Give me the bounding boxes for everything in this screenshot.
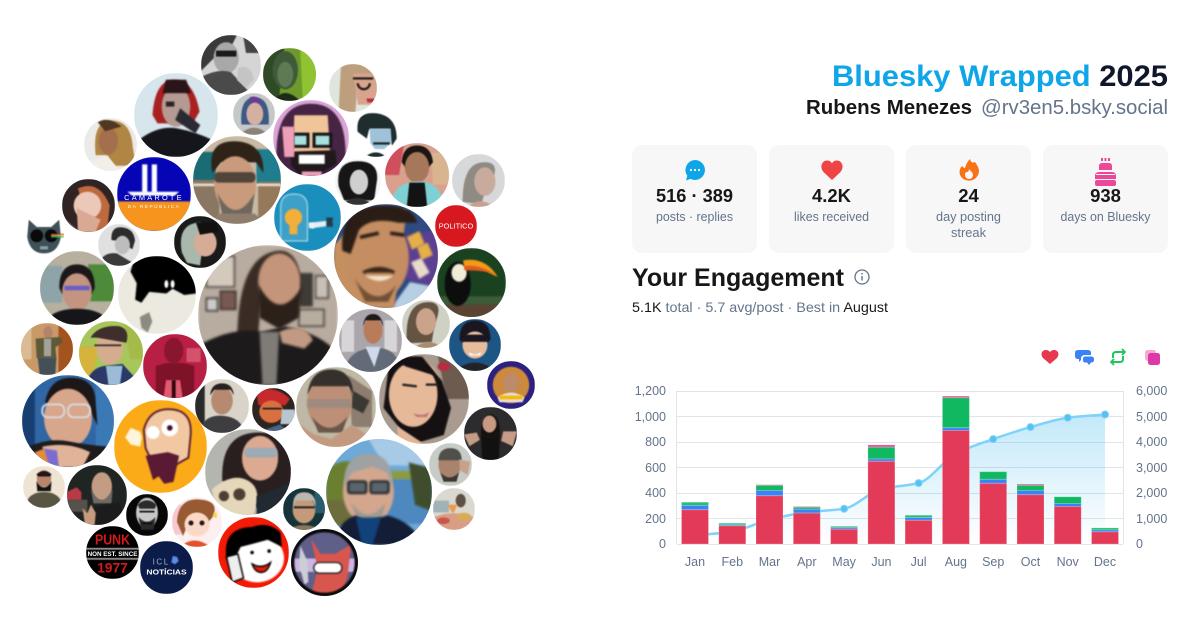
avatar: red duotone comic (143, 334, 207, 398)
icon: birthday cake (1095, 158, 1116, 186)
stat card: posts and replies (632, 145, 757, 253)
avatar: PUNK non est since 1977: 1977 (97, 561, 128, 576)
avatar: black blob illustration (118, 256, 196, 334)
avatar: badge with man, purple ring (487, 361, 535, 409)
engagement chart (635, 384, 1167, 569)
bar: Feb (719, 523, 746, 544)
left axis: 800 (645, 435, 666, 449)
legend icon: reposts (1111, 349, 1125, 365)
avatar: smiling man with tarot cards (334, 204, 438, 308)
avatar: woman with purple glasses (40, 251, 114, 325)
right axis: 5,000 (1136, 410, 1167, 424)
avatar: Camarote da Republica logo (117, 157, 191, 231)
avatar: smiling woman with dark curly hair (379, 354, 469, 444)
right axis: 3,000 (1136, 461, 1167, 475)
left axis: 0 (659, 537, 666, 551)
left axis (635, 384, 666, 551)
avatar: orange haired woman (62, 179, 115, 232)
avatar: bald cartoon on yellow (114, 400, 207, 493)
bar: Oct (1017, 484, 1044, 544)
month labels: Oct (1021, 555, 1041, 569)
avatar: PUNK non est since 1977: PUNK (95, 533, 131, 549)
avatar: long-haired woman (402, 300, 450, 348)
avatar: man with glasses, shirtless (296, 367, 376, 447)
month labels: Sep (982, 555, 1004, 569)
avatar: cartoon man with glasses (273, 100, 349, 176)
avatar: main profile, man with long hair and beard (198, 245, 338, 385)
avatar: ICL Noticias: NOTÍCIAS (146, 567, 187, 576)
bar: Mar (756, 485, 783, 544)
right axis: 6,000 (1136, 384, 1167, 398)
avatar: ICL Noticias (140, 541, 193, 594)
stat card: days on Bluesky (1043, 145, 1168, 253)
left axis: 200 (645, 512, 666, 526)
avatar: woman with skull (205, 429, 291, 515)
avatar: woman with blue glasses, rainbow shirt (22, 375, 114, 467)
subtitle: name and handle: @rv3en5.bsky.social (981, 97, 1168, 119)
stat card: day posting streak: streak (951, 225, 986, 240)
month labels: Dec (1094, 555, 1116, 569)
stat card: day posting streak: day posting (936, 209, 1001, 224)
legend icon: likes (1042, 350, 1058, 364)
avatar: Camarote da Republica logo: CAMAROTE (124, 193, 184, 202)
bar: Jul (905, 515, 932, 544)
avatar: man with light blue shirt (385, 143, 449, 207)
month labels: Jun (871, 555, 892, 569)
avatar: woman showing hands (464, 407, 517, 460)
avatar: bearded man small (23, 466, 65, 508)
avatar: anime boy (449, 319, 501, 371)
avatar: black and white woman (98, 224, 140, 266)
month labels: Jan (685, 555, 705, 569)
bar: Apr (793, 506, 820, 544)
avatar: pink cartoon cat with knife (291, 529, 358, 596)
bar: Jun (868, 445, 895, 544)
stat card: day posting streak: 24 (958, 185, 979, 206)
heading: your engagement: Your Engagement (632, 264, 845, 292)
stat card: likes received: likes received (794, 209, 869, 224)
avatar: woman with glasses, blonde (329, 64, 377, 112)
left axis: 1,200 (635, 384, 666, 398)
right axis: 4,000 (1136, 435, 1167, 449)
avatar: POLITICO logo (435, 205, 477, 247)
avatar: Camarote da Republica logo: DA REPÚBLICA (128, 203, 180, 210)
avatar: old man with glasses (283, 488, 325, 530)
right axis: 1,000 (1136, 512, 1167, 526)
legend icon: quotes (1145, 350, 1160, 365)
right axis: 2,000 (1136, 486, 1167, 500)
month labels: Jul (911, 555, 927, 569)
avatar: man with short hair (195, 379, 249, 433)
avatar: silver haired woman (174, 216, 226, 268)
avatar: cartoon girl blue face (356, 112, 398, 157)
bar: Jan (682, 502, 708, 544)
avatar: POLITICO logo: POLITICO (439, 223, 474, 231)
stacked bars (682, 396, 1118, 544)
avatar: PUNK non est since 1977: NON EST. SINCE (88, 551, 137, 558)
stat card: days on Bluesky: days on Bluesky (1060, 209, 1151, 224)
stat card: posts and replies: posts · replies (656, 209, 733, 224)
cumulative line (695, 414, 1105, 536)
right axis (1136, 384, 1167, 551)
avatar: food and drink (433, 488, 475, 530)
avatar: man smoking, black and white (201, 35, 261, 95)
avatar: lake man with glasses and hoodie (326, 439, 432, 545)
month labels: Apr (797, 555, 817, 569)
avatar: PUNK non est since 1977 (86, 526, 139, 579)
avatar: cartoon face on red (218, 517, 289, 588)
avatar: man making rock sign (67, 465, 127, 525)
subtitle: name and handle: Rubens Menezes (806, 97, 972, 119)
month labels: Mar (759, 555, 780, 569)
bar: Sep (980, 472, 1007, 544)
avatar: man in beanie (429, 443, 472, 486)
legend icon: replies (1075, 350, 1094, 365)
stat card: likes received (769, 145, 894, 253)
bar: Nov (1054, 497, 1081, 544)
avatar: lightbulb in birdcage (274, 184, 341, 251)
month labels: Nov (1057, 555, 1080, 569)
right axis: 0 (1136, 537, 1143, 551)
avatar: ICL Noticias: ICL (153, 557, 170, 566)
avatar: engraving portrait (126, 494, 168, 536)
stat card: day posting streak (906, 145, 1031, 253)
avatar: older woman with grey hair (452, 154, 505, 207)
avatar: suit man smiling (339, 309, 402, 372)
month labels: May (832, 555, 857, 569)
avatar: cartoon girl with brown hair (172, 497, 222, 547)
avatar: toucan (437, 248, 506, 317)
cumulative area (695, 414, 1105, 544)
month labels: Aug (945, 555, 967, 569)
avatar: curly black haired woman bw (336, 160, 380, 205)
icon: speech bubble (686, 160, 705, 180)
avatar: blonde woman (84, 118, 137, 171)
avatar: green elf (263, 48, 316, 101)
avatar: cat with prism glasses (26, 215, 64, 254)
bar: Dec (1092, 528, 1118, 544)
icon: heart (821, 160, 843, 180)
avatar: red cap man (252, 388, 295, 431)
avatar bubble cluster (21, 35, 535, 596)
avatar: curly haired man with bookshelf (193, 136, 281, 224)
cumulative dots (841, 411, 1108, 512)
left axis: 400 (645, 486, 666, 500)
avatar: red hair person (134, 73, 218, 157)
left axis: 1,000 (635, 410, 666, 424)
month labels: Feb (722, 555, 743, 569)
stat card: days on Bluesky: 938 (1090, 185, 1121, 206)
title: Bluesky Wrapped 2025 (832, 60, 1168, 93)
month labels (685, 555, 1116, 569)
avatar: purple hair woman (233, 93, 275, 135)
bar: Aug (942, 396, 969, 544)
avatar: man in hat on wall (21, 323, 73, 375)
icon: info (855, 270, 869, 284)
icon: flame (960, 159, 979, 181)
bar: May (831, 526, 858, 544)
chart legend (1042, 349, 1160, 365)
stat card: posts and replies: 516 · 389 (656, 185, 733, 206)
avatar: young man with flat cap (79, 321, 143, 385)
left axis: 600 (645, 461, 666, 475)
subtitle: name and handle (806, 97, 1168, 119)
stat card: likes received: 4.2K (812, 185, 852, 206)
engagement summary: 5.1K total · 5.7 avg/post · Best in August (632, 299, 888, 315)
